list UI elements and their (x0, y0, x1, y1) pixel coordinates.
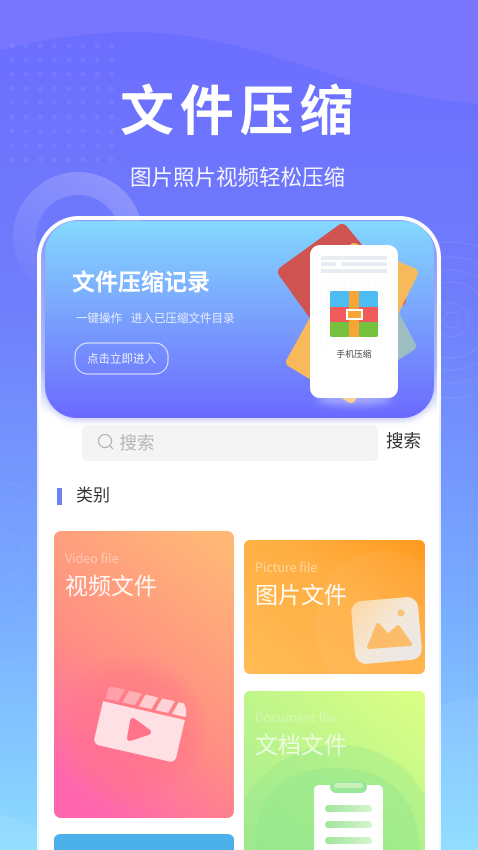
section marker (57, 488, 62, 505)
phone screen (41, 415, 437, 850)
icon: clipboard (314, 781, 383, 850)
banner (45, 221, 434, 418)
phone frame (39, 218, 439, 850)
section heading: 类别 (76, 486, 110, 505)
card: video: 视频文件 (65, 573, 157, 599)
dot pattern (5, 39, 118, 167)
lower background wave right (441, 697, 478, 850)
card: video: Video file (65, 548, 119, 567)
search button text: 搜索 (386, 431, 421, 451)
card: document: Document file (255, 707, 337, 726)
phone label: 手机压缩 (336, 348, 372, 359)
card: picture (244, 540, 425, 674)
icon: image (350, 596, 423, 665)
enter button: 点击立即进入 (87, 352, 156, 366)
banner heading: 文件压缩记录 (72, 269, 210, 295)
card: document: 文档文件 (255, 732, 347, 758)
card: blue (54, 834, 234, 850)
search box: 搜索 (120, 433, 154, 453)
icon: archive (330, 291, 378, 337)
title: 文件压缩 (120, 82, 359, 142)
subtitle: 图片照片视频轻松压缩 (130, 166, 345, 190)
search box (82, 425, 378, 461)
card: picture: 图片文件 (255, 582, 347, 608)
concentric circles left (0, 427, 128, 683)
background wave (0, 0, 478, 104)
illustration: stacked cards and phone (284, 230, 413, 405)
lower background wave left (0, 815, 37, 850)
card: picture: Picture file (255, 557, 317, 576)
concentric circles right (373, 242, 478, 398)
banner description 2: 进入已压缩文件目录 (131, 311, 234, 325)
banner description: 一键操作 (76, 311, 122, 325)
card: document (244, 691, 425, 850)
card: video (54, 531, 234, 818)
icon: search (98, 434, 113, 449)
enter button (75, 343, 168, 374)
decorative ring (24, 184, 132, 290)
icon: clapperboard (93, 686, 188, 763)
